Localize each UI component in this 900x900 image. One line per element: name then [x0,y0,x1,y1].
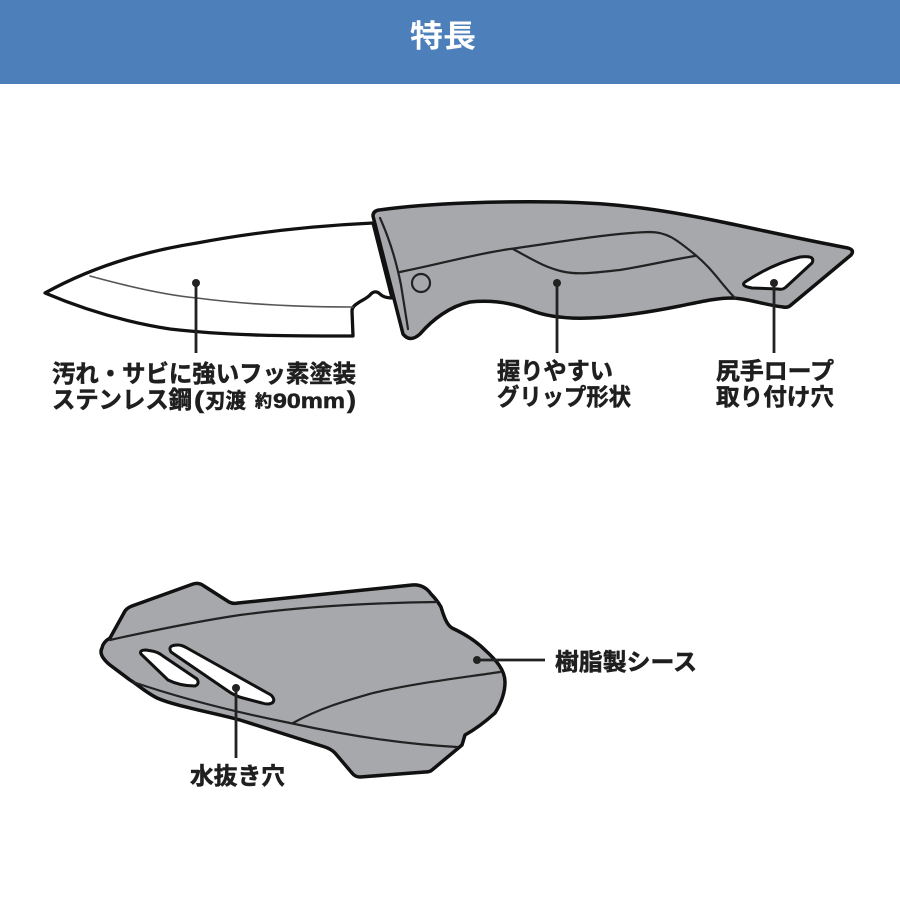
callout: lanyard hole [716,279,835,410]
sheath upper seam [110,602,437,640]
label: attachment hole: 取り付け穴 [716,384,834,410]
sheath body [101,583,505,777]
label: blade steel: ステンレス鋼 [52,387,192,414]
callout: blade [52,279,356,414]
handle bolster line [380,218,408,329]
label: drain holes: 水抜き穴 [190,763,285,789]
label: lanyard: 尻手ロープ [716,358,835,384]
label: blade steel: 刃渡 [205,390,246,413]
label: blade steel [52,387,356,414]
sheath curved seam [293,672,500,723]
label: blade steel: 90mm [273,390,345,413]
drain hole small [141,650,198,686]
handle contour line [400,232,735,298]
label: grip: 握りやすい [497,358,613,384]
blade hamon line [90,276,353,307]
header band [0,0,900,84]
label: blade steel: ( [194,387,204,414]
sheath lower seam [133,682,457,747]
callout: grip [497,279,631,410]
label: blade steel: ) [347,387,356,414]
callout: drain holes [190,684,285,789]
label: blade coating: 汚れ・サビに強いフッ素塗装 [52,361,356,388]
grip panel line [513,249,695,273]
label: grip shape: グリップ形状 [497,383,631,410]
callout: resin sheath [473,649,697,675]
lanyard hole [744,257,813,289]
drain hole large [170,645,274,704]
title: 特長 [410,19,476,54]
knife handle [373,202,852,338]
label: resin sheath: 樹脂製シース [555,649,697,675]
rivet circle [412,274,430,292]
knife blade [45,223,392,336]
label: blade steel: 約 [255,392,272,411]
knife illustration [45,202,852,338]
sheath illustration [101,583,505,777]
